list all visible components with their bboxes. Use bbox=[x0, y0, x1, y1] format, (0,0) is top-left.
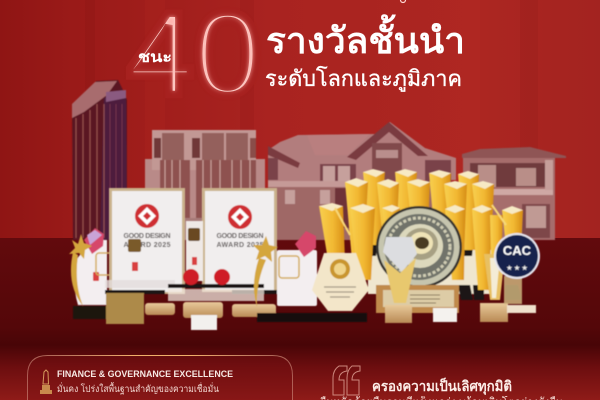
heading: win label: ชนะ bbox=[138, 49, 172, 66]
award: center clear trophy block bbox=[105, 221, 280, 294]
panel description: มั่นคง โปร่งใสพื้นฐานสำคัญของความเชื่อมั่น bbox=[57, 382, 219, 395]
heading: main title: รางวัลชั้นนำ bbox=[266, 14, 465, 61]
background: red curtain wall bbox=[0, 0, 600, 240]
award: black base strip bbox=[257, 313, 367, 322]
icon: G-mark logo bbox=[135, 204, 159, 228]
gold trophies: white and black lower bases bbox=[368, 238, 522, 300]
award: crystal diamond trophy bbox=[383, 237, 417, 303]
building: main house bbox=[268, 122, 458, 240]
building: right house bbox=[462, 147, 566, 240]
award label text: GOOD DESIGN bbox=[124, 233, 170, 240]
certificate: good design award 1 bbox=[105, 188, 185, 294]
award label text: AWARD 2025 bbox=[124, 242, 171, 249]
award label text bbox=[124, 233, 171, 249]
icon: pink badge bbox=[295, 231, 316, 257]
icon: gold star right bbox=[253, 236, 278, 262]
icon: pink badge bbox=[84, 228, 104, 254]
award: plate wood stand with plaque bbox=[376, 285, 459, 323]
buildings row bbox=[72, 80, 566, 240]
small white card center bbox=[191, 315, 217, 330]
award label text bbox=[216, 233, 264, 249]
icon: G-mark logo bbox=[228, 205, 252, 229]
award label text: AWARD 2025 bbox=[216, 242, 264, 249]
panel heading: FINANCE & GOVERNANCE EXCELLENCE bbox=[57, 369, 233, 379]
quote heading: ครองความเป็นเลิศทุกมิติ bbox=[372, 377, 512, 395]
award label text: GOOD DESIGN bbox=[216, 233, 264, 240]
certificate: good design award 2 bbox=[202, 188, 277, 292]
panel: finance & governance excellence bbox=[28, 356, 292, 400]
background: dark floor fading to red bbox=[0, 238, 600, 400]
award: right clear plaque with star bbox=[253, 231, 317, 307]
award: large decorative plate bbox=[376, 206, 462, 288]
award: CAC badge bbox=[494, 233, 540, 279]
building: townhomes bbox=[145, 130, 265, 240]
awards group bbox=[69, 169, 540, 330]
gold info box bbox=[106, 293, 144, 324]
heading: subtitle: ระดับโลกและภูมิภาค bbox=[265, 66, 462, 92]
icon: trophy bbox=[40, 370, 52, 394]
small white card right bbox=[433, 308, 457, 322]
award: round wood bases bbox=[145, 289, 276, 318]
gold trophies: back row bbox=[345, 169, 494, 260]
award: glass trophy on right bbox=[480, 254, 536, 322]
building: condo tower bbox=[72, 80, 127, 240]
top text fragment bbox=[400, 0, 406, 2]
award: CAC badge: CAC bbox=[503, 243, 532, 258]
award: left clear plaque with star bbox=[69, 228, 117, 319]
icon: gold star left bbox=[69, 234, 92, 259]
award: CAC badge: ★ ★ ★ bbox=[506, 265, 528, 272]
icon: red buttons bbox=[183, 269, 230, 285]
icon: quotation marks bbox=[333, 366, 360, 395]
award: white shield trophy with seal bbox=[312, 253, 369, 311]
gold trophies: front row bbox=[319, 203, 523, 290]
